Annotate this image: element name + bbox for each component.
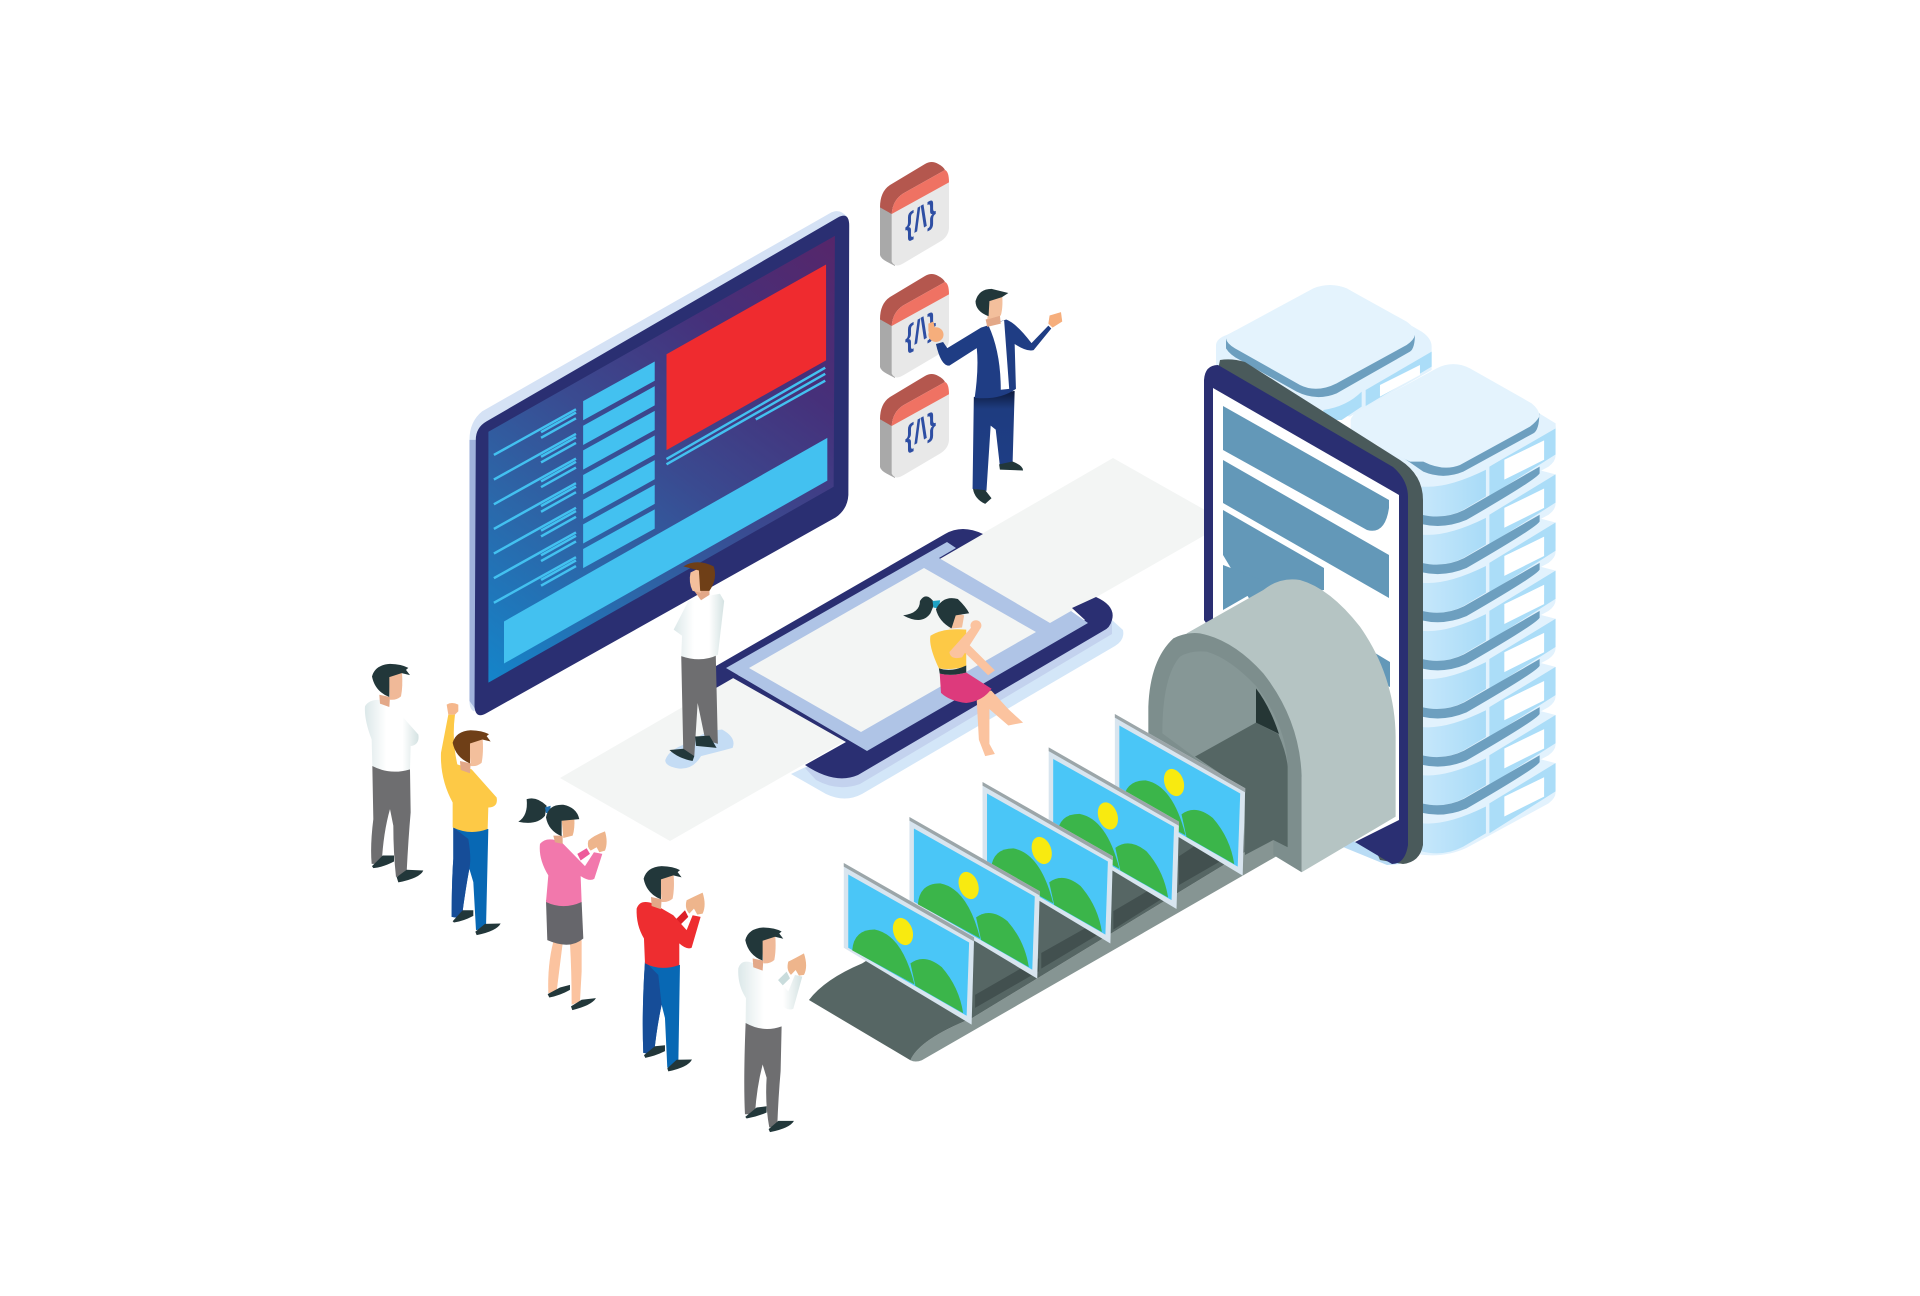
- person 4: red sweater: [637, 866, 705, 1071]
- flat tablet on floor: [716, 529, 1123, 798]
- monitor screen: [488, 236, 835, 683]
- person 1: white shirt: [365, 664, 423, 882]
- girl sitting on tablet: [903, 596, 1023, 756]
- back server stack: [1216, 285, 1432, 420]
- cyan bar column: [583, 362, 655, 568]
- code icon 2: {/\}: [905, 305, 936, 357]
- scanner tunnel: [1148, 579, 1396, 872]
- red content block: [666, 264, 826, 450]
- belt slats: [975, 814, 1243, 1008]
- phone screen: [1213, 388, 1399, 842]
- person 5: white shirt clapping: [738, 927, 806, 1132]
- code calendar icons: [880, 162, 949, 478]
- upright phone: [1204, 359, 1423, 865]
- lines under red block: [666, 368, 825, 464]
- code icon 2: [880, 274, 949, 378]
- front server top cap: [1351, 364, 1556, 480]
- monitor: [469, 211, 849, 715]
- code icon 1: {/\}: [905, 193, 936, 245]
- code icon 3: {/\}: [905, 405, 936, 457]
- front server stack: [1417, 422, 1556, 855]
- code icon 1: [880, 162, 949, 266]
- conveyor belt: [809, 783, 1287, 1061]
- person 3: pink sweater and skirt: [518, 798, 607, 1010]
- code icon 3: [880, 374, 949, 478]
- man with crossed arms at monitor: [665, 562, 734, 769]
- presenter in blue suit: [928, 289, 1062, 504]
- person 2: yellow sweater: [441, 703, 501, 935]
- floor mat: [560, 458, 1205, 841]
- code line rows: [494, 409, 576, 603]
- phone content bars: [1223, 406, 1390, 687]
- picture cards on conveyor: [844, 714, 1245, 1025]
- cyan footer block: [504, 438, 827, 663]
